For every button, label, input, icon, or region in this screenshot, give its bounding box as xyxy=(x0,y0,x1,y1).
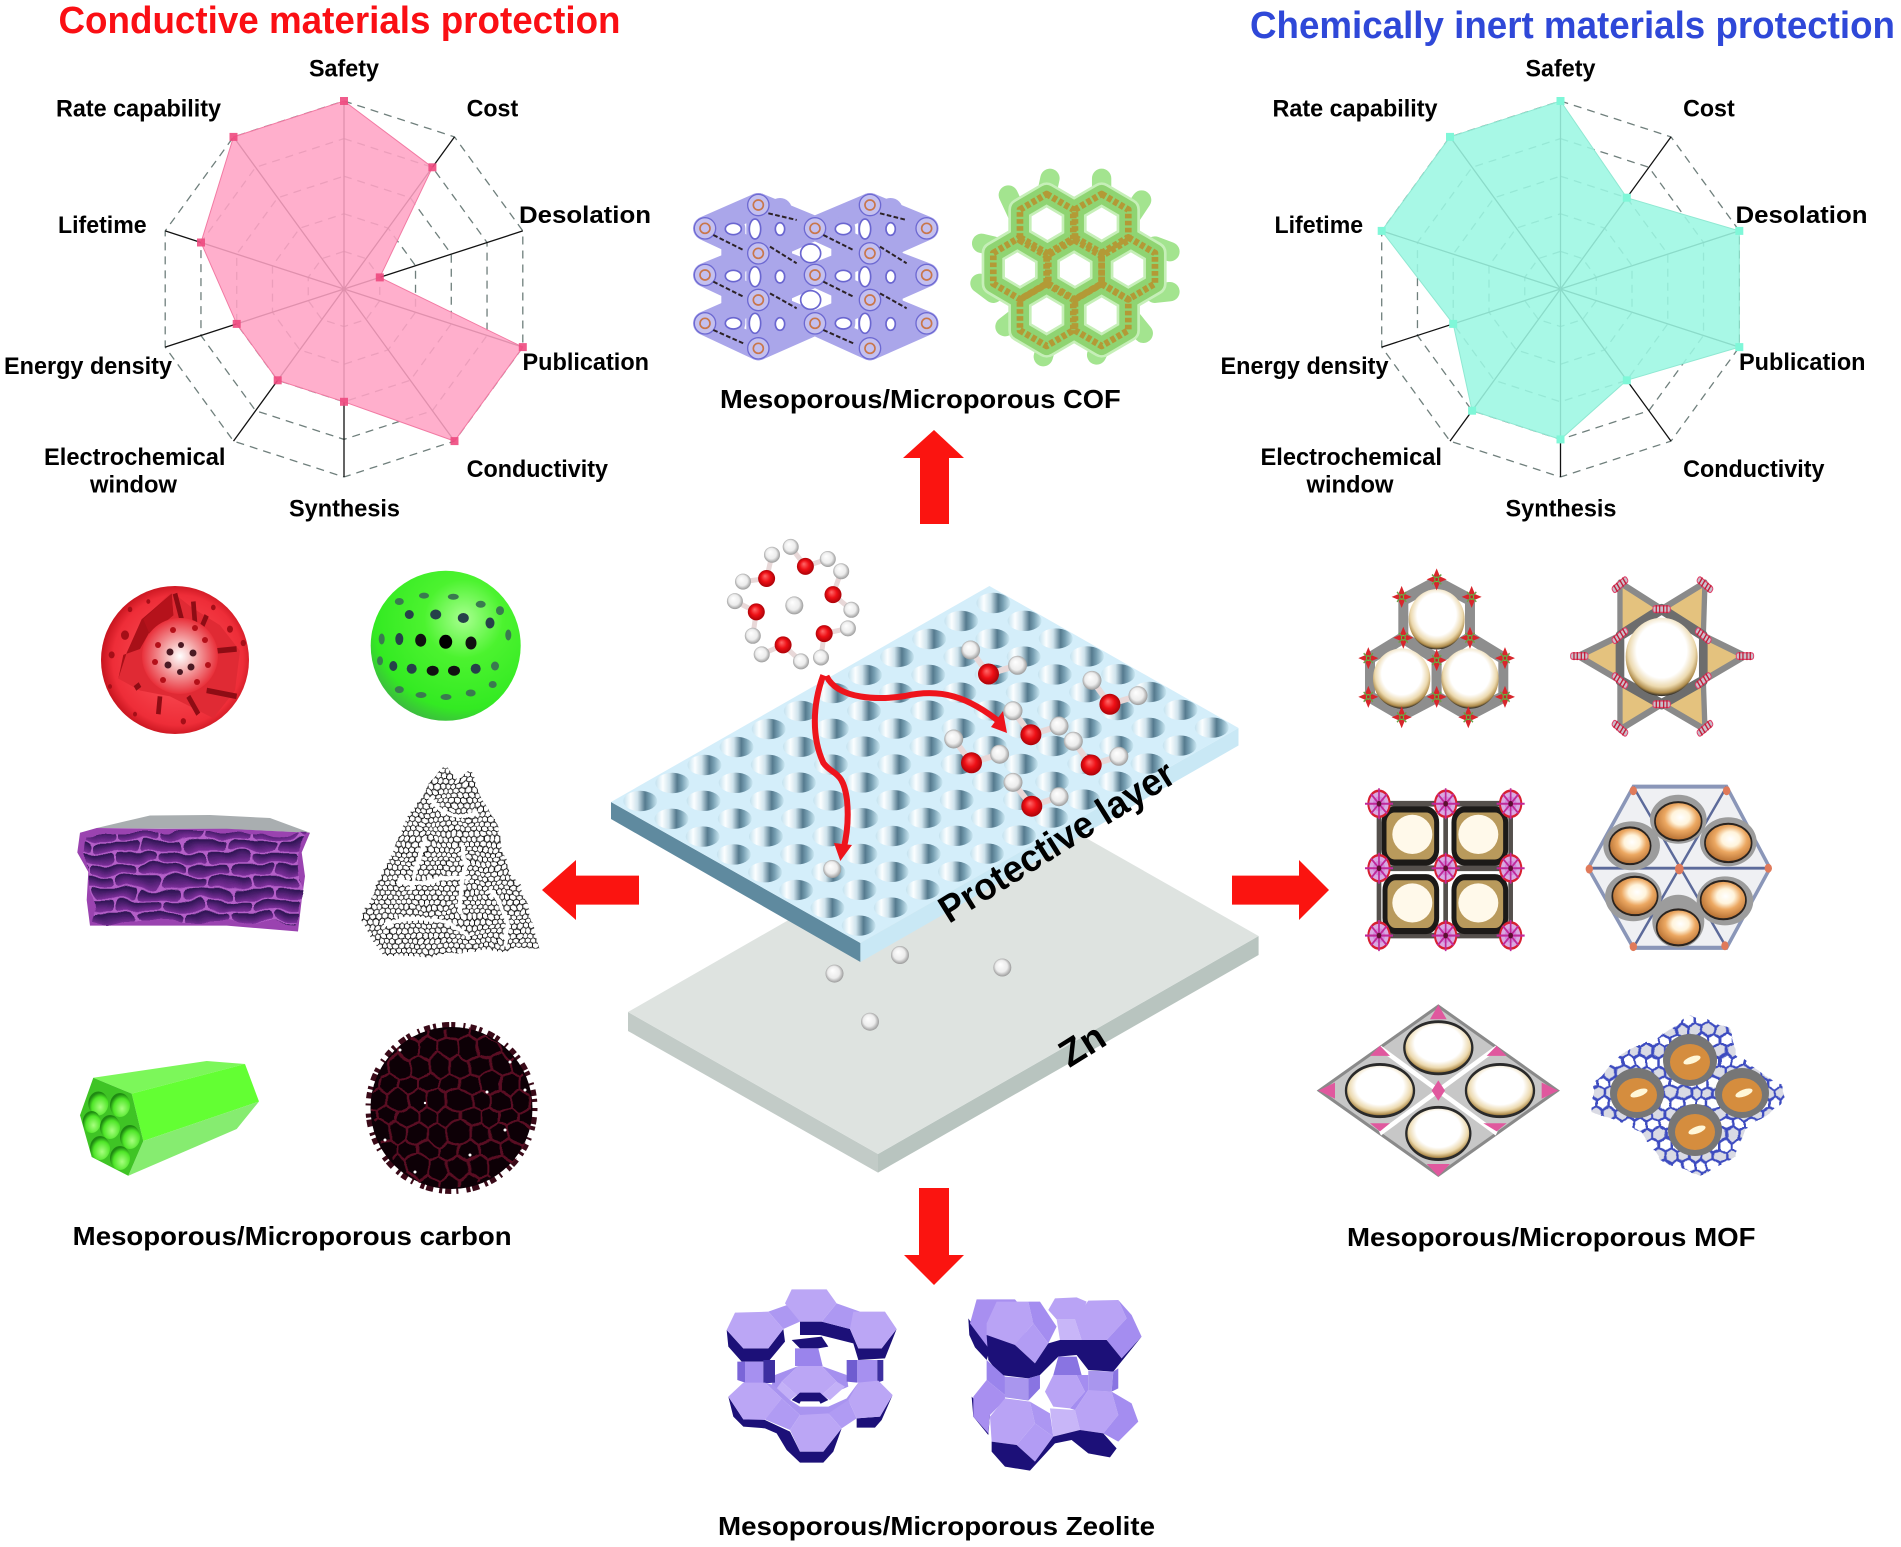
zeolite cage two xyxy=(968,1297,1142,1471)
MOF: three-pore honeycomb xyxy=(1358,568,1515,728)
zinc ions on plate xyxy=(826,946,1011,1031)
panel: COF structures xyxy=(694,178,1170,414)
axis labels: chemically inert xyxy=(1220,56,1868,522)
caption: zeolite: Mesoporous/Microporous Zeolite xyxy=(718,1511,1155,1541)
panel: protective layer plate xyxy=(611,586,1238,962)
purple porous block xyxy=(77,815,310,932)
title: conductive materials protection: Conductive materials protection xyxy=(58,0,620,42)
radar chart: chemically inert materials xyxy=(1220,56,1868,522)
radar chart: conductive materials xyxy=(4,56,651,522)
zeolite cage one xyxy=(727,1289,897,1463)
pore lattice xyxy=(623,593,1229,936)
green porous sphere xyxy=(371,571,521,721)
panel: porous carbon structures xyxy=(73,571,540,1251)
data markers: chemically inert xyxy=(1378,97,1743,443)
red porous sphere xyxy=(101,586,249,734)
MOF: blue framework xyxy=(1593,1015,1787,1176)
MOF: square-pore lattice xyxy=(1365,788,1525,951)
arrow: right to MOF xyxy=(1232,860,1329,920)
label: protective layer: Protective layer xyxy=(932,753,1183,932)
axis labels: conductive xyxy=(4,56,651,522)
caption: carbon: Mesoporous/Microporous carbon xyxy=(73,1221,512,1251)
free water molecules on the plate xyxy=(944,640,1148,817)
arrow: zinc ion path through pore xyxy=(815,675,852,861)
zinc ion entering pore xyxy=(823,860,841,878)
caption: COF: Mesoporous/Microporous COF xyxy=(720,384,1121,414)
data markers: conductive xyxy=(197,97,527,445)
graphene mesh triangle xyxy=(362,764,540,957)
arrow: up to COF xyxy=(903,430,964,524)
arrow: water blocked path xyxy=(826,676,1007,733)
data polygon: chemically inert xyxy=(1382,101,1739,439)
hydrated zinc ion cluster xyxy=(727,539,859,669)
arrow: down to zeolite xyxy=(904,1188,964,1285)
green hexagonal tube xyxy=(80,1061,259,1176)
data polygon: conductive xyxy=(201,101,523,441)
title: chemically inert materials protection: Chemically inert materials protection xyxy=(1250,5,1895,47)
dark carbon sphere xyxy=(370,1026,534,1190)
label: Zn: Zn xyxy=(1052,1016,1113,1076)
panel: zeolite structures xyxy=(718,1289,1155,1541)
arrow: left to carbon xyxy=(542,860,639,920)
panel: zinc plate xyxy=(628,794,1259,1173)
MOF: hexagonal cage xyxy=(1586,786,1772,951)
blue COF structure xyxy=(694,194,937,359)
panel: MOF structures xyxy=(1318,568,1787,1252)
caption: MOF: Mesoporous/Microporous MOF xyxy=(1347,1222,1756,1252)
MOF: star with central pore xyxy=(1571,575,1754,738)
green COF structure xyxy=(980,178,1170,357)
MOF: rhombic lattice xyxy=(1318,1005,1558,1176)
